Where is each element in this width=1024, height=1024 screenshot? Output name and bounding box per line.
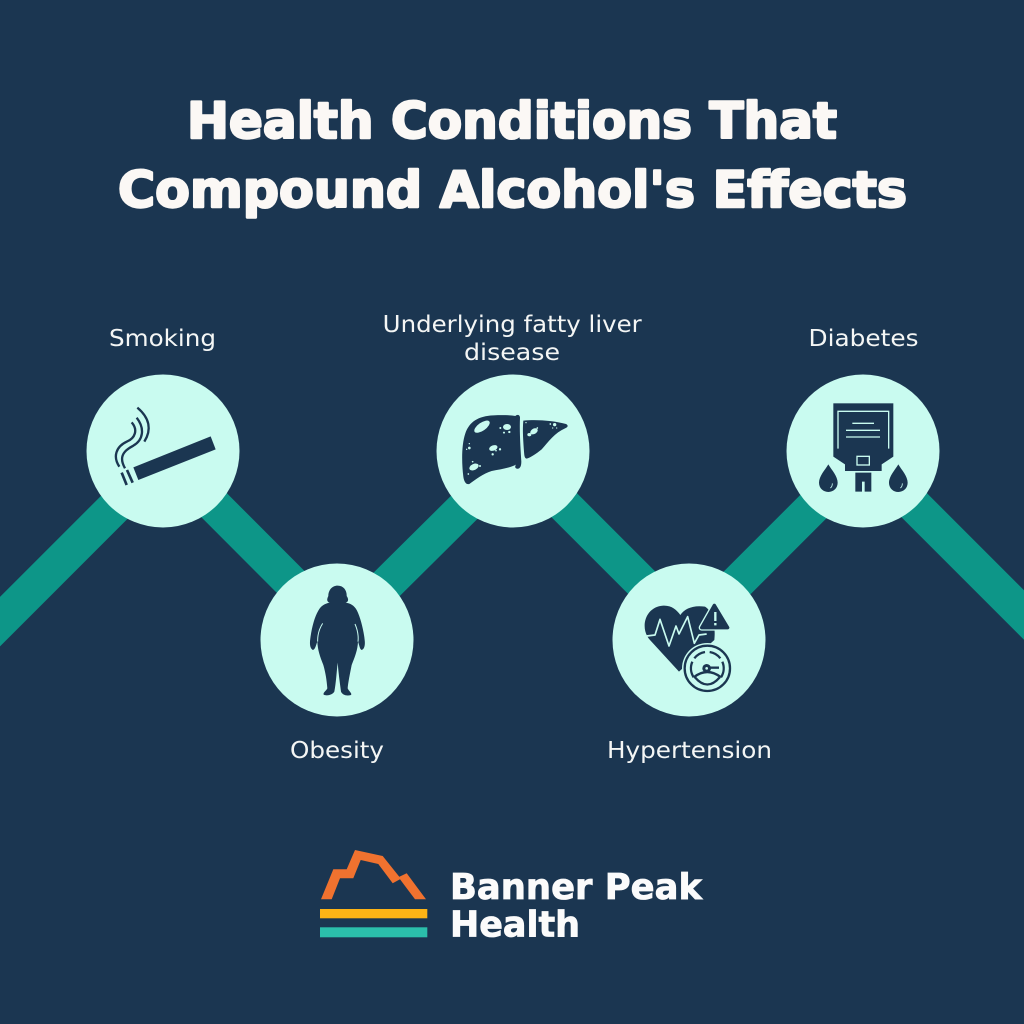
- step: smoking: [86, 326, 240, 528]
- title: Health Conditions That: [187, 92, 837, 150]
- circle: obesity: [260, 564, 414, 716]
- step: fatty liver: [383, 312, 642, 528]
- logo yellow bar: [320, 909, 427, 918]
- logo wordmark: [450, 867, 703, 946]
- icon: glucose meter and drops: [819, 403, 908, 492]
- icon: cigarette: [116, 408, 216, 485]
- logo wordmark: Banner Peak: [450, 867, 703, 908]
- logo mountain: [321, 850, 426, 899]
- step: diabetes: [786, 326, 940, 528]
- icon: heart with gauge and warning: [645, 605, 733, 694]
- circle: hypertension: [612, 564, 766, 716]
- logo wordmark: Health: [450, 904, 580, 946]
- label: smoking: Smoking: [109, 326, 216, 352]
- label: obesity: Obesity: [290, 738, 384, 764]
- label: hypertension: Hypertension: [607, 738, 772, 764]
- logo teal bar: [320, 927, 427, 937]
- icon: liver: [462, 415, 568, 484]
- circle: smoking: [86, 374, 240, 528]
- label: fatty liver: [383, 312, 642, 366]
- title: Compound Alcohol's Effects: [118, 161, 907, 219]
- icon: obese figure: [310, 586, 365, 696]
- circle: diabetes: [786, 374, 940, 528]
- label: diabetes: Diabetes: [808, 326, 918, 352]
- label: fatty liver: Underlying fatty liver: [383, 312, 642, 338]
- title: [118, 92, 907, 219]
- zigzag line: [0, 456, 1024, 662]
- step: hypertension: [607, 564, 772, 764]
- logo: Banner Peak Health: [320, 850, 703, 946]
- label: fatty liver: disease: [464, 340, 560, 366]
- step: obesity: [260, 564, 414, 764]
- circle: fatty liver: [436, 374, 590, 528]
